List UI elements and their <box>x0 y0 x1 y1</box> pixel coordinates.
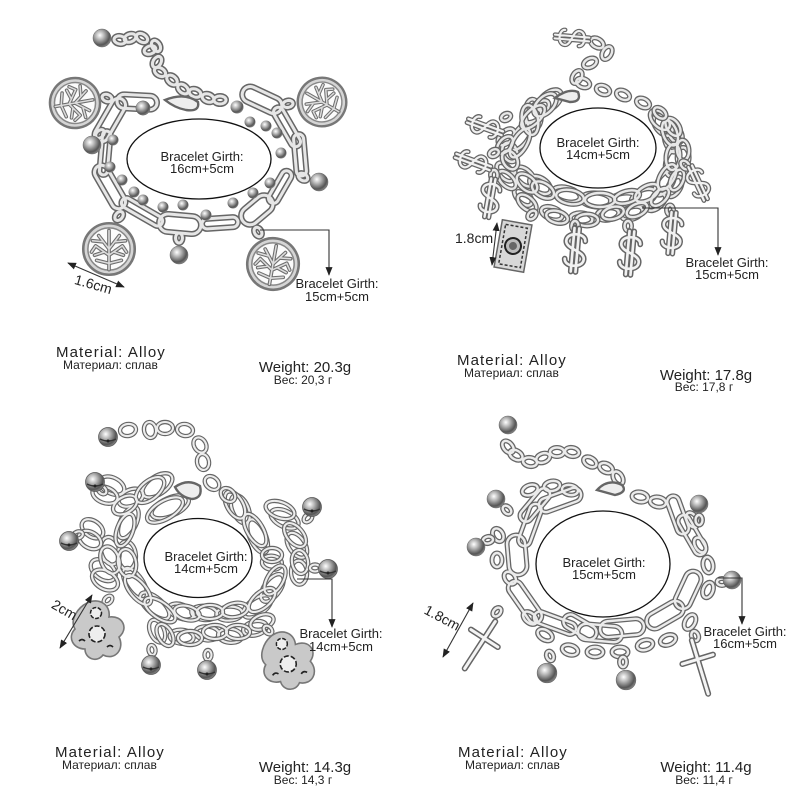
callout: outer girth <box>297 579 383 654</box>
oval inner size label: 16cm+5cm <box>170 161 234 176</box>
callout: outer girth: 15cm+5cm <box>695 267 759 282</box>
material label: Material: Alloy <box>55 744 165 761</box>
dimension: flower height <box>49 595 92 648</box>
oval inner size label <box>127 119 271 199</box>
weight label: Weight: 14.3g <box>259 759 351 776</box>
weight label: Weight: 20.3g <box>259 359 351 376</box>
oval inner size label: Bracelet Girth: <box>164 549 248 564</box>
material label <box>56 344 166 372</box>
icon: lobster clasp <box>165 96 198 110</box>
callout: outer girth: 14cm+5cm <box>309 639 373 654</box>
icon: tree coin charms <box>46 69 355 294</box>
icon: bell charms <box>60 428 338 680</box>
oval inner size label: 14cm+5cm <box>174 561 238 576</box>
weight label: Weight: 17.8g <box>660 367 752 384</box>
material label <box>457 352 567 380</box>
icon: ball charms <box>467 416 741 690</box>
material label: Material: Alloy <box>56 344 166 361</box>
panel: flower bell bracelet <box>49 421 383 787</box>
oval inner size label: 14cm+5cm <box>566 147 630 162</box>
bracelet: paperclip chain and extender <box>92 32 309 243</box>
icon: lobster clasp <box>175 482 201 499</box>
material label <box>55 744 165 772</box>
bracelet: curb chains and extender <box>488 36 695 234</box>
weight label: Вес: 20,3 г <box>274 373 333 387</box>
callout: outer girth <box>260 230 379 304</box>
material label: Материал: сплав <box>62 758 157 772</box>
dimension: flower height: 2cm <box>49 596 80 623</box>
bracelet: cable chains and extender <box>67 421 320 660</box>
oval inner size label: 15cm+5cm <box>572 567 636 582</box>
weight label: Вес: 14,3 г <box>274 773 333 787</box>
material label: Material: Alloy <box>458 744 568 761</box>
callout: outer girth: Bracelet Girth: <box>703 624 787 639</box>
callout: outer girth: 15cm+5cm <box>305 289 369 304</box>
material label: Материал: сплав <box>464 366 559 380</box>
bracelet: paperclip and curb chains <box>482 439 727 667</box>
callout: outer girth <box>703 578 787 651</box>
oval inner size label: Bracelet Girth: <box>562 555 646 570</box>
oval inner size label <box>536 511 670 617</box>
oval inner size label <box>540 108 656 188</box>
oval inner size label: Bracelet Girth: <box>160 149 244 164</box>
icon: flower charms <box>71 601 321 695</box>
callout: outer girth: Bracelet Girth: <box>299 626 383 641</box>
panel: cross bracelet <box>422 416 787 787</box>
material label <box>458 744 568 772</box>
icon: ball charms <box>83 29 328 264</box>
panel: dollar sign bracelet <box>453 29 769 394</box>
callout: outer girth: Bracelet Girth: <box>295 276 379 291</box>
icon: dollar charms <box>453 29 713 276</box>
dimension: banknote height: 1.8cm <box>455 230 493 246</box>
weight label <box>259 359 351 387</box>
weight label: Вес: 11,4 г <box>675 773 733 787</box>
weight label: Weight: 11.4g <box>660 759 752 776</box>
dimension: cross height <box>422 602 473 657</box>
dimension: coin diameter <box>68 263 124 297</box>
callout: outer girth <box>642 208 769 282</box>
oval inner size label: Bracelet Girth: <box>556 135 640 150</box>
material label: Материал: сплав <box>63 358 158 372</box>
icon: lobster clasp <box>555 91 579 102</box>
dimension: cross height: 1.8cm <box>422 602 463 634</box>
dimension: coin diameter: 1.6cm <box>73 271 114 297</box>
weight label <box>660 759 752 787</box>
dimension: banknote height <box>455 223 497 265</box>
weight label <box>660 367 752 394</box>
icon: cross charms <box>451 613 723 698</box>
weight label: Вес: 17,8 г <box>675 380 734 394</box>
material label: Материал: сплав <box>465 758 560 772</box>
callout: outer girth: 16cm+5cm <box>713 636 777 651</box>
bracelet: bead strand <box>104 100 286 220</box>
panel: tree of life bracelet <box>46 29 379 387</box>
material label: Material: Alloy <box>457 352 567 369</box>
icon: lobster clasp <box>597 482 624 495</box>
weight label <box>259 759 351 787</box>
icon: banknote charm <box>494 220 532 272</box>
callout: outer girth: Bracelet Girth: <box>685 255 769 270</box>
oval inner size label <box>144 518 252 598</box>
